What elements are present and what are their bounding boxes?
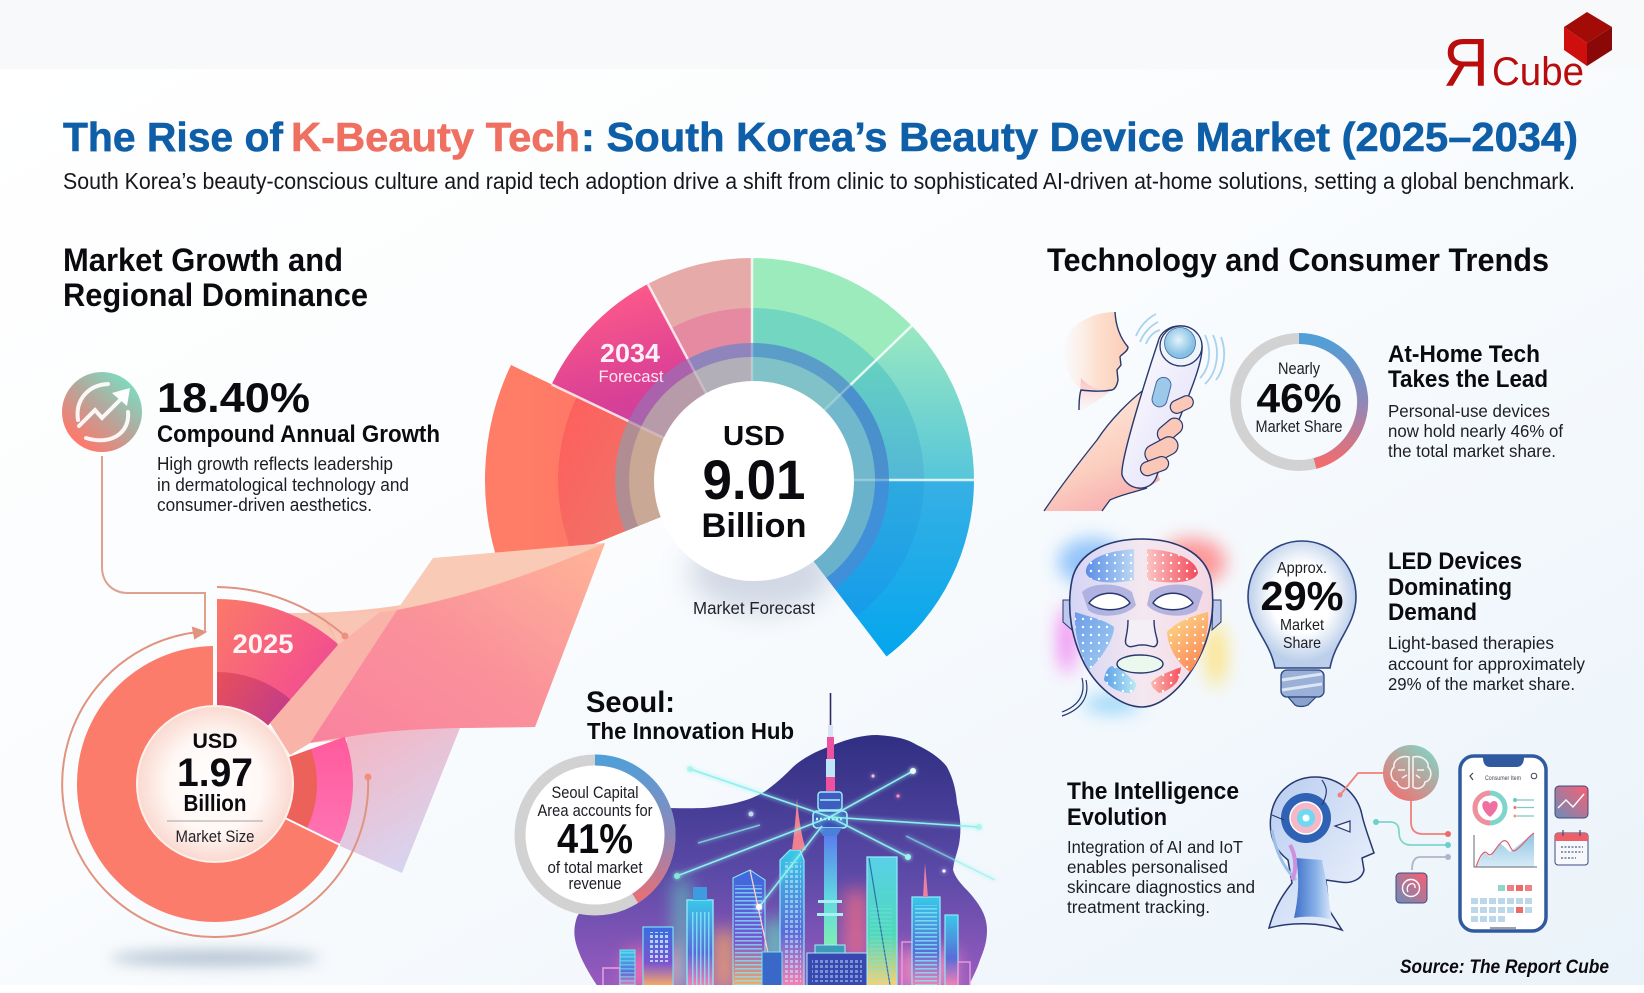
- forecast centre circle: 9.01: [702, 448, 806, 511]
- text: LED devices: LED Devices: [1388, 548, 1522, 575]
- stat: CAGR: High growth reflects leadership: [157, 454, 393, 474]
- 2025 sector: 2025: [232, 629, 294, 659]
- sector: blue lower right: [752, 480, 974, 656]
- logo: RCube: Я: [1443, 25, 1489, 101]
- text: intelligence evolution: [1067, 778, 1255, 917]
- text: LED devices: 29% of the market share.: [1388, 674, 1575, 694]
- orbit arrow: [62, 587, 372, 937]
- network lines: [677, 769, 995, 907]
- network nodes: [674, 766, 982, 910]
- donut chart: 2025 market size: [62, 587, 397, 966]
- text: at-home tech: At-Home Tech: [1388, 341, 1540, 368]
- label: 2034 forecast: [598, 338, 664, 386]
- centre circle: Market Size: [176, 828, 254, 846]
- title: : South Korea’s Beauty Device Market (2025–2034): [581, 114, 1578, 160]
- text: intelligence evolution: Evolution: [1067, 804, 1167, 831]
- buildings: [603, 798, 970, 988]
- N Seoul Tower: [807, 693, 867, 987]
- icon: bulb with 29%: Share: [1283, 635, 1321, 652]
- icon: bulb with 29%: [1248, 541, 1356, 706]
- trend: at-home tech: [1044, 312, 1563, 511]
- donut main arc: [77, 646, 339, 922]
- centre circle: Billion: [184, 790, 246, 816]
- ring stat: 41% Seoul: Seoul Capital: [552, 784, 638, 802]
- ring: 46%: Market Share: [1256, 418, 1342, 436]
- skyline glows: [625, 880, 957, 990]
- text: LED devices: account for approximately: [1388, 654, 1585, 674]
- trend: LED devices: [1058, 538, 1585, 716]
- ring stat: 41% Seoul: Area accounts for: [538, 802, 653, 820]
- phone chart: [1474, 833, 1537, 867]
- pink sector: [215, 737, 353, 844]
- centre circle: USD: [192, 730, 238, 753]
- heading: market growth: [63, 242, 368, 313]
- icon: bulb with 29%: 29%: [1260, 573, 1344, 619]
- stat: CAGR: in dermatological technology and: [157, 475, 409, 495]
- icon: brain: [1383, 745, 1439, 801]
- text: at-home tech: the total market share.: [1388, 441, 1556, 461]
- sector: 2034 forecast: [552, 284, 752, 480]
- stat: CAGR: Compound Annual Growth: [157, 421, 440, 448]
- connectors: [1338, 773, 1451, 870]
- phone app: Consumer Item: [1485, 776, 1521, 782]
- city blob: [574, 735, 987, 990]
- logo: RCube: [1443, 12, 1612, 101]
- label: market forecast: Market Forecast: [693, 598, 815, 618]
- source note: Source: The Report Cube: [1400, 957, 1609, 978]
- ring: 46%: [1236, 338, 1363, 466]
- title: [63, 114, 1578, 160]
- illustration: Seoul skyline: [574, 693, 995, 990]
- sector: green top right: [752, 258, 912, 480]
- heading: Seoul: The Innovation Hub: [587, 718, 794, 744]
- centre circle: 1.97: [177, 751, 253, 795]
- label: 2034 forecast: 2034: [600, 338, 661, 368]
- icon: bulb with 29%: Market: [1280, 617, 1324, 634]
- 2025 sector: [217, 599, 397, 784]
- illustration: hand holding device: [1044, 312, 1224, 511]
- title: The Rise of: [63, 114, 283, 160]
- ring stat: 41% Seoul: [520, 760, 670, 910]
- icon: growth arrow: [62, 372, 142, 452]
- stat: CAGR: consumer-driven aesthetics.: [157, 495, 372, 515]
- phone heart ring: [1475, 793, 1505, 823]
- text: intelligence evolution: skincare diagnostics and: [1067, 877, 1255, 897]
- growth funnel: [270, 543, 605, 873]
- icon: calendar tile: [1555, 830, 1588, 865]
- icon: bulb with 29%: Approx.: [1277, 560, 1327, 577]
- big forecast fan chart: [485, 258, 974, 656]
- text: at-home tech: Personal-use devices: [1388, 401, 1550, 421]
- label: 2034 forecast: Forecast: [598, 367, 664, 386]
- heading: market growth: Market Growth and: [63, 242, 343, 278]
- text: LED devices: [1388, 548, 1585, 694]
- heading: technology trends: Technology and Consumer Trends: [1047, 242, 1549, 278]
- heading: Seoul: [586, 686, 794, 744]
- forecast centre circle: USD: [723, 420, 785, 451]
- ring: 46%: 46%: [1256, 375, 1342, 421]
- icon: small tile: [1396, 873, 1427, 903]
- text: at-home tech: [1388, 341, 1563, 461]
- forecast centre circle: Billion: [702, 507, 806, 545]
- stat: CAGR: [62, 372, 440, 515]
- text: LED devices: Demand: [1388, 599, 1477, 626]
- text: LED devices: Light-based therapies: [1388, 633, 1554, 653]
- illustration: LED mask: [1058, 538, 1227, 716]
- bottom band: [0, 985, 1644, 993]
- shadow under forecast circle: [690, 532, 834, 612]
- ring stat: 41% Seoul: 41%: [557, 815, 633, 862]
- title: K-Beauty Tech: [291, 114, 580, 160]
- ring stat: 41% Seoul: of total market: [548, 859, 643, 877]
- phone app: [1460, 756, 1546, 931]
- ring: 46%: Nearly: [1278, 360, 1321, 378]
- trend: intelligence evolution: [1067, 745, 1588, 931]
- sector: teal right: [752, 326, 974, 480]
- text: at-home tech: Takes the Lead: [1388, 366, 1548, 393]
- sector: pale top: [648, 258, 752, 480]
- text: intelligence evolution: treatment tracking.: [1067, 897, 1210, 917]
- heading: Seoul: Seoul:: [586, 686, 675, 719]
- text: intelligence evolution: enables personalised: [1067, 857, 1228, 877]
- forecast centre circle: [654, 381, 854, 581]
- text: intelligence evolution: The Intelligence: [1067, 778, 1239, 805]
- phone calendar grid: [1471, 885, 1532, 922]
- stat: CAGR: 18.40%: [157, 374, 310, 421]
- icon: trend tile: [1555, 786, 1588, 818]
- text: at-home tech: now hold nearly 46% of: [1388, 421, 1563, 441]
- text: LED devices: Dominating: [1388, 574, 1512, 601]
- logo: RCube: Cube: [1492, 50, 1584, 94]
- connector: CAGR to 2025: [102, 456, 205, 632]
- sector: coral left: [485, 365, 752, 580]
- heading: market growth: Regional Dominance: [63, 277, 368, 313]
- centre circle: [137, 706, 293, 862]
- text: intelligence evolution: Integration of AI and IoT: [1067, 837, 1243, 857]
- ground shadow: [110, 950, 320, 966]
- ring stat: 41% Seoul: revenue: [568, 875, 622, 893]
- illustration: AI robot head: [1269, 777, 1374, 930]
